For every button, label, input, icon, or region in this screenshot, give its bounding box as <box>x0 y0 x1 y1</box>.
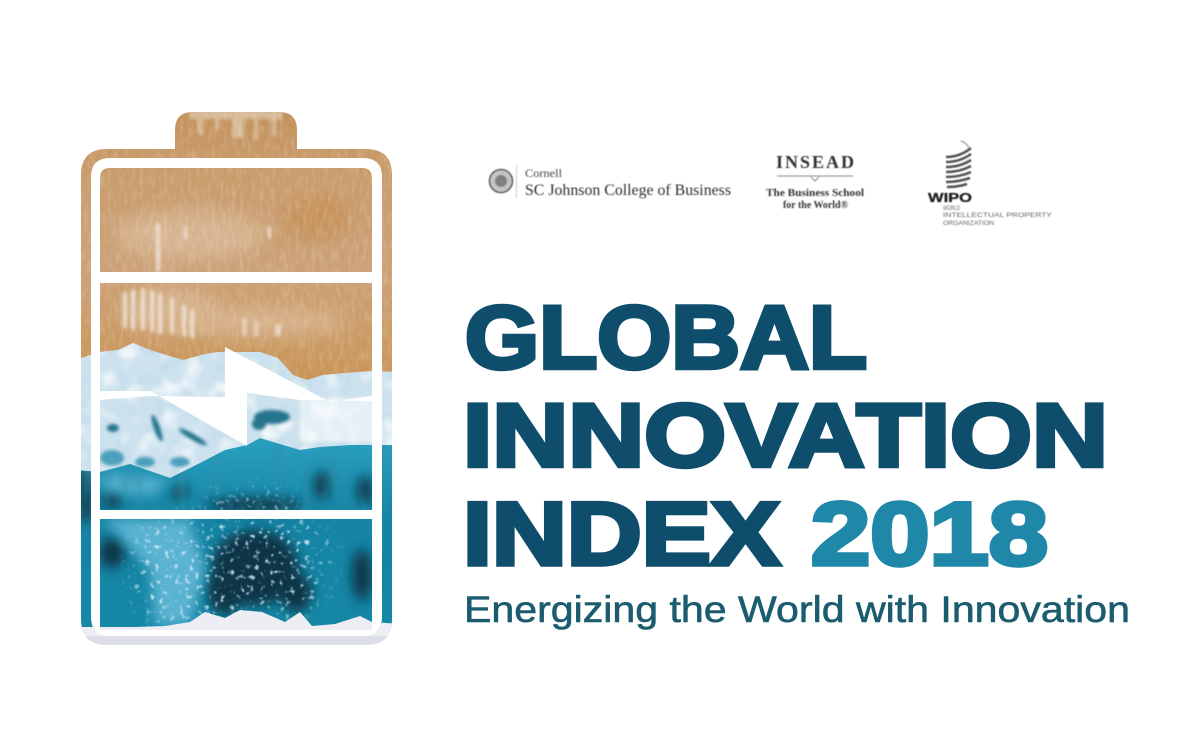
icon: battery filled with aerial beach photo texture <box>75 105 400 650</box>
pale sand patches <box>115 210 350 336</box>
whitest foam on the right side <box>300 398 380 442</box>
divider <box>516 165 517 198</box>
pale lavender base <box>86 636 388 645</box>
rule with chevron <box>777 176 853 181</box>
WIPO full name: INTELLECTUAL PROPERTY <box>943 213 1052 219</box>
surf edge at bottom <box>82 610 392 636</box>
INSEAD tagline line 2: for the World® <box>783 199 848 211</box>
deep sea layer <box>75 435 400 635</box>
icon: WIPO globe stripes <box>946 141 971 187</box>
vertical water streaks <box>75 445 400 515</box>
dark foam patches <box>107 410 290 448</box>
title line: INDEX: INDEX <box>463 483 780 583</box>
teal mottling low on the left foam <box>100 450 190 467</box>
WIPO full name <box>943 206 1052 227</box>
grain texture on sand <box>75 105 400 385</box>
dark water shadows <box>78 470 373 615</box>
sand layer <box>81 112 392 380</box>
pale top of battery cap <box>190 110 282 140</box>
logo: Cornell SC Johnson College of Business <box>490 165 731 199</box>
WIPO wordmark: WIPO <box>928 191 972 205</box>
title <box>463 287 1108 583</box>
WIPO full name: ORGANIZATION <box>943 221 994 227</box>
icon: Cornell seal <box>490 170 512 192</box>
title line: INNOVATION: INNOVATION <box>463 385 1108 485</box>
INSEAD tagline line 1: The Business School <box>766 187 864 199</box>
darker sand patch <box>283 196 353 240</box>
logo: INSEAD <box>766 152 864 211</box>
foam layer <box>81 343 392 478</box>
college name: SC Johnson College of Business <box>525 182 731 199</box>
white streaks on sand <box>123 224 280 338</box>
title line: GLOBAL: GLOBAL <box>465 287 867 387</box>
WIPO full name: WORLD <box>943 206 960 212</box>
logo: WIPO <box>928 141 1052 227</box>
bright specks <box>120 477 344 626</box>
title year: 2018: 2018 <box>811 483 1048 583</box>
INSEAD wordmark: INSEAD <box>776 152 854 172</box>
infographic canvas <box>81 112 1128 645</box>
Cornell wordmark: Cornell <box>525 166 563 180</box>
icon: lightning bolt <box>100 347 372 446</box>
light foam column in the sea <box>100 475 205 625</box>
subtitle: Energizing the World with Innovation <box>464 589 1130 630</box>
